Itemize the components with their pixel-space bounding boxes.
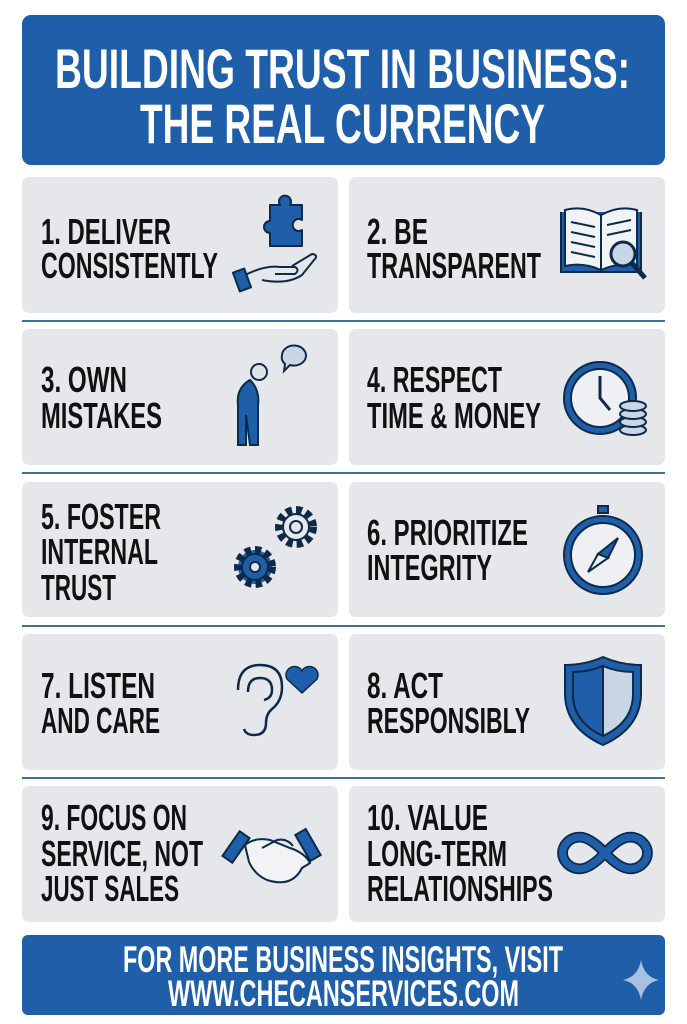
panel: 6 prioritize integrity: 6. PRIORITIZE [367, 512, 528, 553]
panel: 3 own mistakes: 3. OWN [41, 359, 127, 400]
icon: gears [238, 510, 313, 584]
panel: 6 prioritize integrity: INTEGRITY [367, 547, 492, 588]
panel: 1 deliver consistently: CONSISTENTLY [41, 245, 218, 286]
panel: 5 foster internal trust: INTERNAL [41, 531, 158, 572]
panel: 10 value long-term relationships: LONG-TERM [367, 833, 507, 874]
panel: 4 respect time & money [349, 329, 665, 465]
panel: 8 act responsibly: RESPONSIBLY [367, 700, 530, 741]
panel: 3 own mistakes [22, 329, 338, 465]
panel: 9 focus on service: SERVICE, NOT [41, 833, 203, 874]
panel: 10 value long-term relationships: 10. VALUE [367, 797, 488, 838]
panel: 4 respect time & money: 4. RESPECT [367, 359, 502, 400]
panel: 2 be transparent [349, 177, 665, 313]
panel: 10 value long-term relationships: RELATIONSHIPS [367, 868, 553, 909]
icon: infinity [563, 837, 647, 869]
panel: 8 act responsibly [349, 634, 665, 770]
title [22, 15, 665, 165]
icon: compass [564, 506, 642, 594]
panel: 4 respect time & money: TIME & MONEY [367, 395, 541, 436]
icon: clock and coins [564, 362, 646, 435]
panel: 5 foster internal trust [22, 482, 338, 617]
panel: 3 own mistakes: MISTAKES [41, 395, 162, 436]
panel: 2 be transparent: 2. BE [367, 211, 428, 252]
panel: 8 act responsibly: 8. ACT [367, 665, 443, 706]
icon: bowing person with speech bubble [238, 346, 306, 445]
panel: 1 deliver consistently [22, 177, 338, 313]
icon: handshake [222, 829, 321, 882]
panel: 5 foster internal trust: 5. FOSTER [41, 496, 161, 537]
panel: 9 focus on service: JUST SALES [41, 868, 179, 909]
panel: 2 be transparent: TRANSPARENT [367, 245, 541, 286]
icon: puzzle on hand [233, 196, 316, 291]
panel: 7 listen and care: 7. LISTEN [41, 665, 155, 706]
panel: 5 foster internal trust: TRUST [41, 567, 116, 608]
icon: shield [565, 657, 641, 745]
panel: 6 prioritize integrity [349, 482, 665, 617]
panel: 10 value long-term relationships [349, 786, 665, 922]
panel: 9 focus on service: 9. FOCUS ON [41, 797, 187, 838]
panel: 7 listen and care: AND CARE [41, 700, 160, 741]
icon: ear and heart [238, 665, 318, 735]
panel: 9 focus on service [22, 786, 338, 922]
icon: sparkle [623, 960, 659, 1000]
footer [22, 935, 665, 1015]
panel: 1 deliver consistently: 1. DELIVER [41, 211, 171, 252]
icon: book with magnifier [561, 208, 645, 278]
panel: 7 listen and care [22, 634, 338, 770]
